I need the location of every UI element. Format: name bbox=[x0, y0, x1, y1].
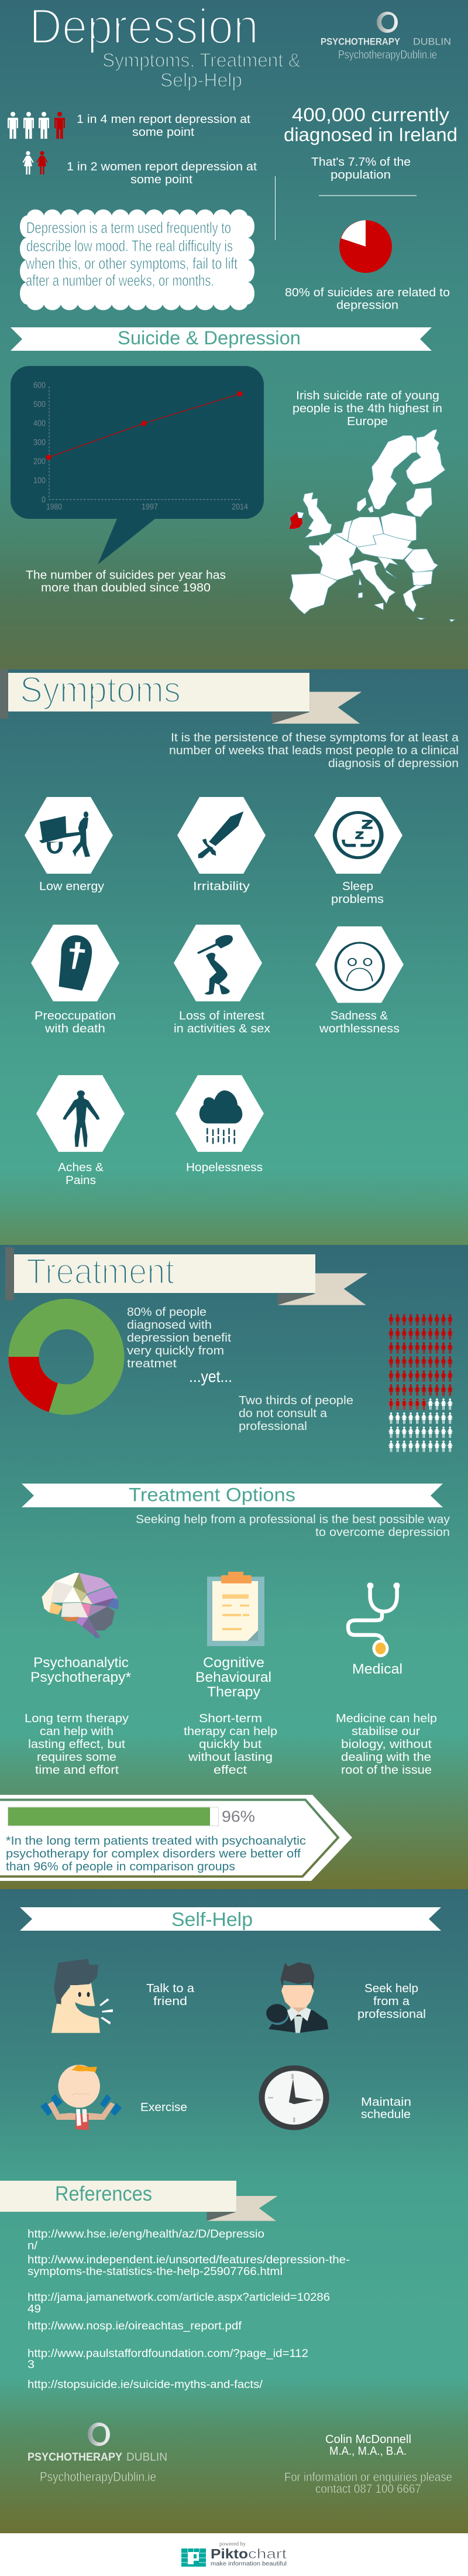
label: seek help: Seek help bbox=[364, 1982, 418, 1995]
line chart: suicides per year bbox=[11, 366, 264, 565]
stat: 400,000 diagnosed: 400,000 currently bbox=[292, 104, 449, 125]
speech bubble bbox=[11, 366, 264, 565]
icon: sword bbox=[198, 812, 243, 858]
x axis labels bbox=[46, 502, 248, 512]
label: seek help bbox=[357, 1982, 426, 2021]
reference list: 3 bbox=[27, 2359, 35, 2371]
label: irritability: Irritability bbox=[193, 880, 250, 893]
y axis labels bbox=[33, 381, 46, 505]
subtitle bbox=[102, 49, 301, 91]
label: sleep problems: problems bbox=[331, 893, 384, 906]
label: loss of interest: in activities & sex bbox=[174, 1022, 270, 1035]
caption: suicides doubled: more than doubled since 1980 bbox=[41, 581, 211, 594]
section background: treatment bbox=[0, 1245, 468, 1889]
label: preoccupation with death: with death bbox=[44, 1022, 105, 1035]
text: 80 percent benefit: depression benefit bbox=[127, 1332, 231, 1345]
stat: men: 1 in 4 men report depression at bbox=[77, 113, 250, 126]
label: low energy: Low energy bbox=[39, 880, 104, 893]
stat: share of population bbox=[311, 156, 411, 182]
definition text: describe low mood. The real difficulty is bbox=[26, 237, 233, 255]
y axis labels: 500 bbox=[33, 399, 46, 409]
option title: cognitive behavioural therapy: Therapy bbox=[207, 1684, 260, 1700]
text: yet: ...yet... bbox=[189, 1367, 232, 1386]
stat: Irish suicide rate: Europe bbox=[347, 415, 388, 428]
label: exercise: Exercise bbox=[140, 2101, 187, 2114]
label: loss of interest bbox=[174, 1010, 270, 1035]
reference list: 49 bbox=[27, 2303, 41, 2315]
description: cognitive behavioural therapy: effect bbox=[214, 1764, 247, 1777]
option title: cognitive behavioural therapy bbox=[195, 1655, 271, 1700]
title: Depression bbox=[29, 0, 259, 54]
symptom: low energy bbox=[25, 797, 113, 874]
heading banner: Treatment Options: Treatment Options bbox=[129, 1484, 295, 1505]
pictogram: two thirds of people bbox=[388, 1314, 453, 1452]
icon: one in four men bbox=[8, 112, 65, 139]
text: seeking help: to overcome depression bbox=[315, 1526, 450, 1539]
icon: professional man bbox=[266, 1962, 328, 2033]
label: aches and pains bbox=[58, 1161, 104, 1187]
symptom: irritability bbox=[177, 797, 266, 874]
caption: suicides doubled: The number of suicides per year has bbox=[26, 569, 226, 582]
stat: 400,000 diagnosed bbox=[284, 104, 457, 145]
pie chart: suicides related to depression bbox=[339, 220, 392, 273]
icon: Piktochart mark bbox=[181, 2548, 206, 2567]
section background: symptoms bbox=[0, 669, 468, 1245]
y axis labels: 100 bbox=[33, 475, 46, 485]
stat: women bbox=[67, 160, 257, 186]
text: two thirds do not consult bbox=[239, 1394, 353, 1433]
heading ribbon: Symptoms: Symptoms bbox=[20, 670, 181, 710]
reference list: http://www.nosp.ie/oireachtas_report.pdf bbox=[27, 2320, 242, 2332]
caption: suicides doubled bbox=[26, 569, 226, 594]
label: aches and pains: Pains bbox=[66, 1174, 96, 1187]
stat: suicides: 80% of suicides are related to bbox=[285, 286, 450, 299]
footer: Piktochart credit bbox=[181, 2541, 287, 2567]
stat: women: 1 in 2 women report depression at bbox=[67, 160, 257, 173]
heading ribbon: References: References bbox=[55, 2182, 152, 2205]
symptom: aches and pains bbox=[36, 1075, 125, 1152]
label: seek help: professional bbox=[357, 2008, 426, 2021]
description: medical: Medicine can help bbox=[336, 1712, 437, 1725]
reference list: n/ bbox=[27, 2240, 38, 2252]
text: 80 percent benefit: very quickly from bbox=[127, 1345, 224, 1357]
symptom: loss of interest bbox=[174, 925, 262, 1001]
icon: clipboard bbox=[207, 1572, 264, 1646]
definition text: when this, or other symptoms, fail to lift bbox=[25, 255, 238, 272]
option title: psychoanalytic psychotherapy: Psychotherapy* bbox=[30, 1670, 131, 1685]
description: psychoanalytic psychotherapy: requires some bbox=[37, 1751, 116, 1764]
text: persistence of symptoms: It is the persistence of these symptoms for at least a bbox=[171, 731, 459, 744]
heading ribbon: References bbox=[0, 2181, 277, 2221]
heading banner: Suicide & Depression: Suicide & Depression bbox=[118, 327, 301, 348]
heading ribbon: Treatment: Treatment bbox=[26, 1251, 174, 1291]
icon: stethoscope bbox=[348, 1582, 400, 1657]
logo website: PsychotherapyDublin.ie bbox=[40, 2469, 156, 2484]
logo wordmark: PSYCHOTHERAPY bbox=[321, 36, 401, 47]
text: 80 percent benefit: treatmet bbox=[127, 1357, 177, 1370]
text: 80 percent benefit: 80% of people bbox=[127, 1306, 207, 1319]
symptom: sleep problems bbox=[314, 797, 402, 874]
x axis labels: 1980 bbox=[46, 502, 62, 512]
definition text: after a number of weeks, or months. bbox=[26, 272, 214, 289]
option title: psychoanalytic psychotherapy bbox=[30, 1655, 131, 1685]
label: sleep problems bbox=[331, 880, 384, 906]
heading banner: Self-Help: Self-Help bbox=[171, 1908, 253, 1930]
logo wordmark light: DUBLIN bbox=[126, 2451, 167, 2464]
label: maintain schedule: Maintain bbox=[361, 2096, 411, 2109]
icon: logo ring bbox=[377, 12, 398, 33]
contact: enquiries bbox=[284, 2471, 452, 2496]
reference list: http://www.independent.ie/unsorted/features/depression-the- bbox=[27, 2254, 350, 2266]
y axis labels: 0 bbox=[42, 495, 46, 505]
wordmark: chart: chart bbox=[248, 2546, 287, 2561]
logo wordmark: PSYCHOTHERAPY bbox=[27, 2451, 122, 2464]
description: medical: stabilise our bbox=[352, 1725, 420, 1738]
description: psychoanalytic psychotherapy: lasting effect, but bbox=[28, 1738, 125, 1751]
stat: Irish suicide rate: Irish suicide rate of young bbox=[296, 389, 439, 402]
contact: enquiries: contact 087 100 6667 bbox=[315, 2482, 421, 2496]
reference list: http://www.paulstaffordfoundation.com/?page_id=112 bbox=[27, 2348, 308, 2360]
description: cognitive behavioural therapy: without lasting bbox=[188, 1751, 273, 1764]
y axis labels: 400 bbox=[33, 418, 46, 429]
contact: name and qualifications bbox=[325, 2433, 411, 2458]
footnote text: *In the long term patients treated with psychoanalytic bbox=[6, 1835, 306, 1848]
footnote text bbox=[6, 1835, 306, 1873]
icon: talking man bbox=[51, 1959, 113, 2033]
stat: share of population: That's 7.7% of the bbox=[311, 156, 411, 169]
icon: one in two women bbox=[22, 151, 48, 175]
logo wordmark light: DUBLIN bbox=[413, 36, 451, 47]
label: preoccupation with death: Preoccupation bbox=[35, 1010, 116, 1022]
option title: cognitive behavioural therapy: Behavioural bbox=[195, 1670, 271, 1685]
stat: Irish suicide rate: people is the 4th highest in bbox=[292, 402, 442, 415]
description: psychoanalytic psychotherapy bbox=[25, 1712, 129, 1777]
tagline: make information beautiful bbox=[211, 2561, 287, 2567]
symptom: sadness and worthlessness bbox=[315, 926, 404, 1003]
text: powered by: powered by bbox=[219, 2541, 246, 2547]
text: two thirds do not consult: do not consult a bbox=[239, 1407, 328, 1420]
callout: 96 percent arrow bbox=[0, 1795, 352, 1881]
reference list: http://www.hse.ie/eng/health/az/D/Depressio bbox=[27, 2228, 264, 2240]
text: seeking help: Seeking help from a professional is the best possible way bbox=[136, 1513, 450, 1526]
option title: cognitive behavioural therapy: Cognitive bbox=[203, 1655, 264, 1671]
text: persistence of symptoms: diagnosis of depression bbox=[328, 757, 459, 770]
icon: logo ring bbox=[88, 2423, 110, 2446]
text: 80 percent benefit bbox=[127, 1306, 231, 1370]
data line bbox=[46, 391, 242, 460]
description: medical: biology, without bbox=[341, 1738, 432, 1751]
option title: psychoanalytic psychotherapy: Psychoanalytic bbox=[33, 1655, 129, 1671]
description: cognitive behavioural therapy: quickly but bbox=[199, 1738, 261, 1751]
progress bar: 96 percent bbox=[8, 1807, 219, 1826]
icon: sad face bbox=[336, 943, 384, 990]
description: cognitive behavioural therapy: Short-term bbox=[199, 1712, 262, 1725]
label: preoccupation with death bbox=[35, 1010, 116, 1035]
definition text: Depression is a term used frequently to bbox=[26, 219, 231, 237]
icon: rain cloud bbox=[199, 1090, 242, 1144]
description: medical: root of the issue bbox=[341, 1764, 432, 1777]
section background: footer bbox=[0, 2533, 468, 2576]
icon: exercising man bbox=[40, 2065, 122, 2130]
icon: human body bbox=[63, 1090, 99, 1147]
wordmark: Pikto: Pikto bbox=[211, 2546, 248, 2561]
icon: coffin with cross bbox=[59, 935, 92, 991]
icon: polygon brain bbox=[42, 1573, 119, 1638]
reference list bbox=[27, 2228, 350, 2391]
reference list: http://jama.jamanetwork.com/article.aspx?articleid=10286 bbox=[27, 2291, 330, 2304]
logo website: PsychotherapyDublin.ie bbox=[338, 49, 437, 61]
heading banner: Self-Help bbox=[20, 1907, 441, 1931]
text: persistence of symptoms bbox=[169, 731, 459, 770]
description: cognitive behavioural therapy: therapy can help bbox=[184, 1725, 277, 1738]
label: hopelessness: Hopelessness bbox=[186, 1161, 263, 1174]
stat: suicides: depression bbox=[336, 299, 398, 312]
logo: Psychotherapy Dublin bbox=[321, 12, 451, 61]
description: psychoanalytic psychotherapy: can help with bbox=[40, 1725, 113, 1738]
heading banner: Suicide & Depression bbox=[11, 327, 432, 351]
icon: figure with broken guitar bbox=[197, 935, 233, 994]
label: sadness and worthlessness: worthlessness bbox=[319, 1022, 400, 1035]
option title: medical: Medical bbox=[352, 1661, 402, 1677]
label: maintain schedule: schedule bbox=[361, 2108, 411, 2121]
text: persistence of symptoms: number of weeks that leads most people to a clinical bbox=[169, 744, 459, 757]
description: psychoanalytic psychotherapy: time and effort bbox=[35, 1764, 119, 1777]
stat: Irish suicide rate bbox=[292, 389, 442, 428]
donut chart: 80 percent benefit bbox=[8, 1314, 109, 1412]
section background: self-help and references bbox=[0, 1889, 468, 2533]
stat: suicides bbox=[285, 286, 450, 312]
stat: 400,000 diagnosed: diagnosed in Ireland bbox=[284, 124, 457, 145]
heading ribbon: Treatment bbox=[5, 1247, 368, 1305]
label: sadness and worthlessness: Sadness & bbox=[331, 1010, 388, 1022]
section background: introduction bbox=[0, 0, 468, 669]
stat: women: some point bbox=[130, 173, 192, 186]
label: talk to a friend: Talk to a bbox=[146, 1982, 195, 1995]
callout: definition cloud bbox=[20, 210, 254, 310]
description: psychoanalytic psychotherapy: Long term therapy bbox=[25, 1712, 129, 1725]
x axis labels: 1997 bbox=[142, 502, 158, 512]
text: two thirds do not consult: Two thirds of people bbox=[239, 1394, 353, 1407]
label: talk to a friend bbox=[146, 1982, 195, 2008]
text: seeking help bbox=[136, 1513, 450, 1539]
stat: men: some point bbox=[132, 126, 194, 139]
description: cognitive behavioural therapy bbox=[184, 1712, 277, 1777]
contact: name and qualifications: M.A., M.A., B.A. bbox=[329, 2445, 407, 2458]
heading banner: Treatment Options bbox=[22, 1484, 443, 1507]
description: medical: dealing with the bbox=[341, 1751, 431, 1764]
reference list: http://stopsuicide.ie/suicide-myths-and-facts/ bbox=[27, 2379, 263, 2391]
symptom: preoccupation with death bbox=[31, 925, 119, 1001]
y axis labels: 300 bbox=[33, 437, 46, 447]
icon: man pulling cart bbox=[39, 812, 90, 857]
x axis labels: 2014 bbox=[232, 502, 248, 512]
text: two thirds do not consult: professional bbox=[239, 1420, 307, 1433]
y axis labels: 600 bbox=[33, 381, 46, 390]
description: medical bbox=[336, 1712, 437, 1777]
label: seek help: from a bbox=[373, 1995, 410, 2008]
subtitle: Symptoms, Treatment & bbox=[102, 49, 301, 71]
label: sadness and worthlessness bbox=[319, 1010, 400, 1035]
stat: share of population: population bbox=[331, 169, 391, 182]
heading ribbon: Symptoms bbox=[0, 669, 362, 724]
symptom: hopelessness bbox=[176, 1075, 264, 1152]
y axis labels: 200 bbox=[33, 457, 46, 466]
footer logo: Psychotherapy Dublin bbox=[27, 2423, 167, 2484]
label: sleep problems: Sleep bbox=[342, 880, 373, 893]
text: 80 percent benefit: diagnosed with bbox=[127, 1319, 212, 1332]
footnote text: psychotherapy for complex disorders were better off bbox=[6, 1848, 301, 1860]
subtitle: Selp-Help bbox=[160, 69, 242, 91]
value: 96 percent: 96% bbox=[222, 1808, 255, 1825]
stat: men bbox=[77, 113, 250, 139]
contact: name and qualifications: Colin McDonnell bbox=[325, 2433, 411, 2446]
icon: sleeping face bbox=[335, 812, 381, 858]
definition text bbox=[25, 219, 238, 289]
map: Europe with Ireland highlighted bbox=[288, 429, 455, 622]
footnote text: than 96% of people in comparison groups bbox=[6, 1860, 235, 1873]
icon: clock bbox=[259, 2065, 329, 2130]
label: loss of interest: Loss of interest bbox=[179, 1010, 264, 1022]
label: maintain schedule bbox=[361, 2096, 411, 2121]
reference list: symptoms-the-statistics-the-help-25907766.html bbox=[27, 2266, 283, 2278]
label: talk to a friend: friend bbox=[153, 1995, 187, 2008]
label: aches and pains: Aches & bbox=[58, 1161, 104, 1174]
